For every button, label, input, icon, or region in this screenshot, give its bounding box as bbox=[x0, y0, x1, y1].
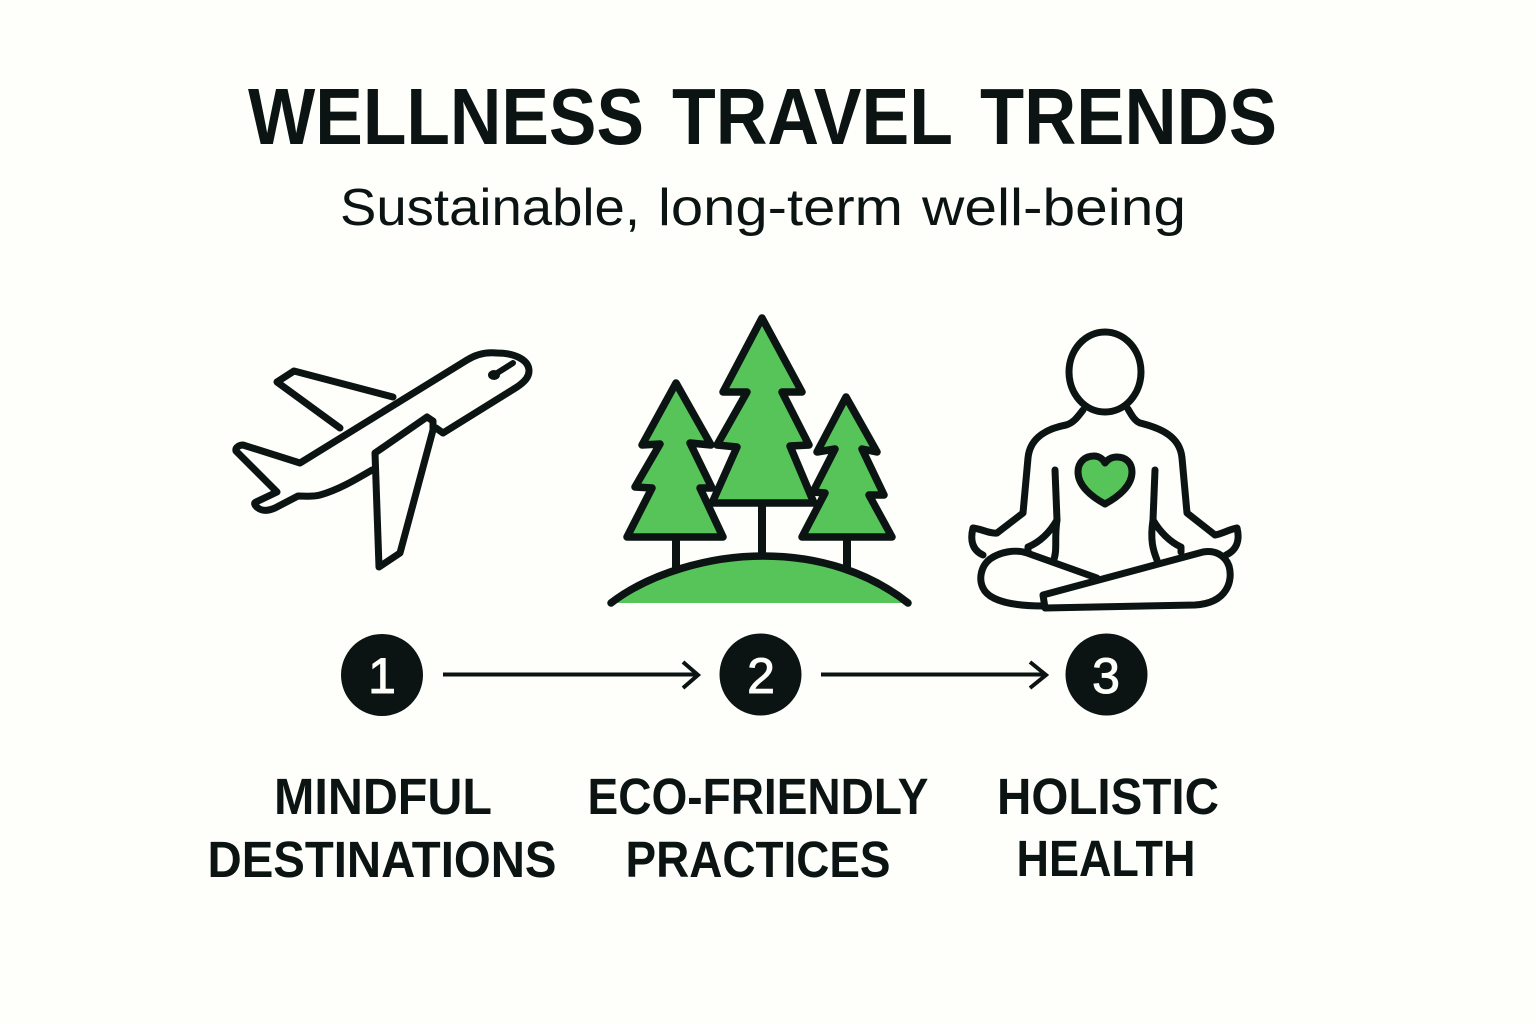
label: holistic health: HEALTH bbox=[1016, 830, 1196, 887]
step badge 1 bbox=[341, 634, 423, 716]
icon: heart bbox=[1078, 456, 1132, 504]
label: mindful destinations: MINDFUL bbox=[274, 768, 492, 825]
icon: airplane bbox=[236, 353, 529, 567]
step badge 2: 2 bbox=[747, 648, 775, 704]
label: eco-friendly practices: ECO-FRIENDLY bbox=[588, 768, 928, 825]
step badge 2 bbox=[720, 634, 802, 716]
subtitle bbox=[340, 179, 1186, 237]
title: WELLNESS bbox=[248, 72, 644, 161]
subtitle: long-term bbox=[658, 179, 903, 237]
arrow 2 to 3 bbox=[821, 662, 1046, 688]
label: mindful destinations: DESTINATIONS bbox=[208, 831, 556, 888]
icon: forest bbox=[611, 318, 908, 603]
title bbox=[248, 72, 1277, 161]
subtitle: well-being bbox=[921, 179, 1186, 237]
arrow 1 to 2 bbox=[443, 662, 698, 688]
step badge 1: 1 bbox=[368, 648, 396, 704]
label: eco-friendly practices: PRACTICES bbox=[626, 831, 890, 888]
label: mindful destinations bbox=[208, 768, 556, 888]
label: holistic health: HOLISTIC bbox=[997, 768, 1219, 825]
icon: meditating person with heart bbox=[972, 332, 1238, 608]
title: TRAVEL bbox=[672, 72, 953, 161]
step badge 3: 3 bbox=[1092, 648, 1120, 704]
label: eco-friendly practices bbox=[588, 768, 928, 888]
title: TRENDS bbox=[980, 72, 1277, 161]
subtitle: Sustainable, bbox=[340, 179, 640, 237]
step badge 3 bbox=[1066, 634, 1148, 716]
label: holistic health bbox=[997, 768, 1219, 887]
